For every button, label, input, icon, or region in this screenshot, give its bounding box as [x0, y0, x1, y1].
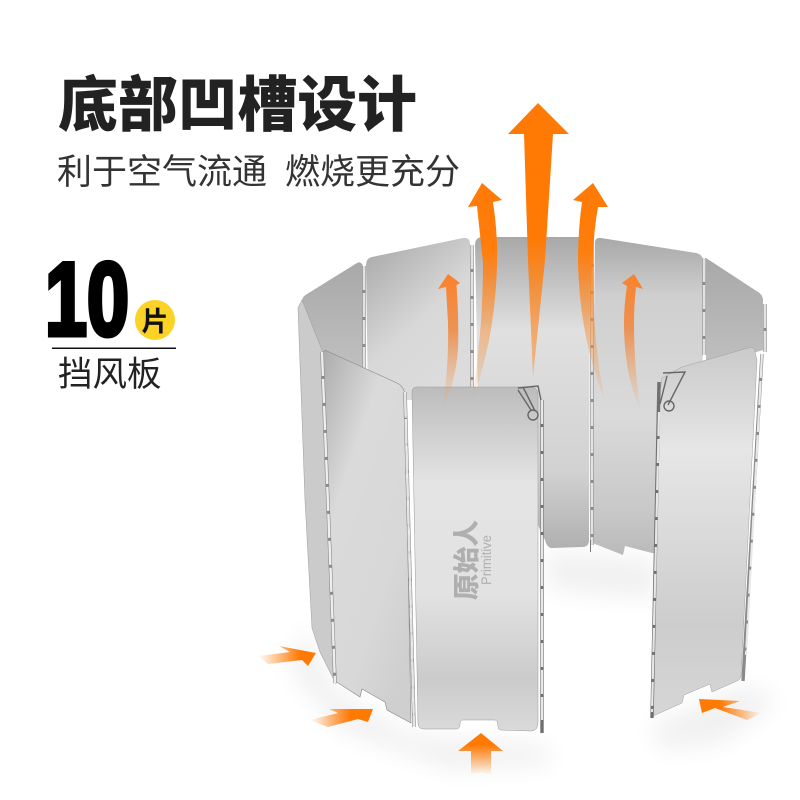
subtitle: 利于空气流通	[57, 153, 267, 192]
wire clip	[518, 386, 541, 420]
yellow circle unit	[135, 300, 175, 340]
airflow arrow: bottom centre	[458, 733, 503, 775]
back panel left	[366, 238, 473, 400]
heat arrow: far right small	[622, 274, 643, 412]
back panel right	[591, 238, 703, 560]
back panel far left	[302, 262, 364, 370]
airflow arrow: lower right	[699, 699, 762, 720]
subtitle second part: 燃烧更充分	[285, 153, 460, 192]
heat arrow: right	[573, 183, 608, 400]
windscreen product	[298, 237, 765, 733]
wire clip	[660, 372, 685, 411]
title: 底部凹槽设计	[58, 72, 417, 139]
logo: Primitive	[479, 535, 494, 585]
centre front panel	[405, 386, 542, 733]
heat arrow: left	[468, 183, 502, 400]
caption: 挡风板	[58, 356, 162, 394]
back panel far right	[706, 258, 763, 368]
airflow arrow: bottom left	[310, 709, 373, 727]
right front panel	[652, 348, 762, 718]
left front panel	[322, 350, 414, 727]
logo: 原始人	[452, 519, 482, 600]
back hinges	[364, 240, 765, 552]
heat arrow: far left small	[438, 274, 460, 410]
back panel centre	[475, 237, 590, 548]
yellow circle unit: 片	[142, 307, 168, 337]
number 10: 10	[45, 242, 129, 358]
panel count badge	[45, 242, 176, 394]
airflow arrow: lower left	[258, 646, 316, 666]
left outer panel	[298, 300, 336, 684]
heat arrow: centre	[508, 103, 569, 377]
ground shadow	[290, 550, 780, 770]
